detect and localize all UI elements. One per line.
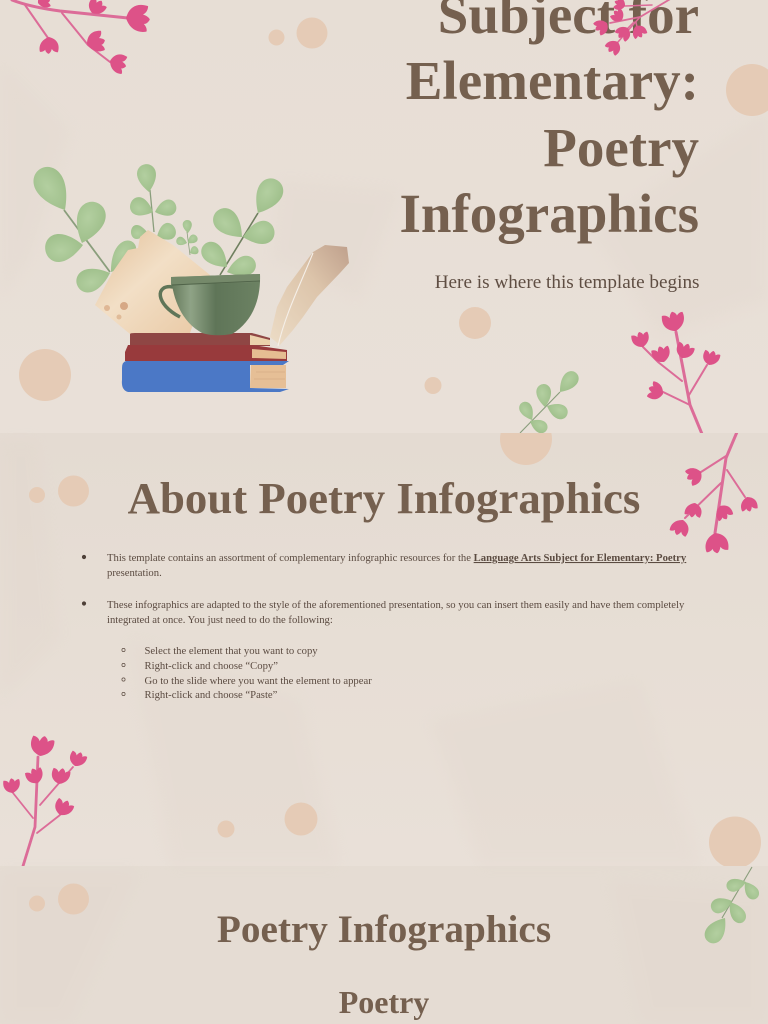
sub-list <box>122 646 372 701</box>
book: blue <box>122 361 289 392</box>
plant: right sprig <box>197 174 288 281</box>
parchment <box>95 230 210 334</box>
subtitle: Here is where this template begins <box>435 272 700 293</box>
book: red <box>125 345 287 361</box>
background: slide 1 <box>0 0 768 433</box>
branch: slide 1 right pink <box>630 309 721 434</box>
body text: bullet list <box>82 553 687 701</box>
plant: centre sprig <box>127 163 179 244</box>
title <box>400 0 699 244</box>
branch: top left pink <box>12 0 150 75</box>
sub-list: Right-click and choose “Copy” <box>144 661 278 672</box>
background: slide 3 <box>0 866 768 1024</box>
bullet 2: integrated at once. You just need to do the following: <box>107 615 333 626</box>
title: Poetry <box>543 117 699 178</box>
sub-list: Right-click and choose “Paste” <box>144 690 278 701</box>
branch: slide 2 right pink <box>669 432 759 555</box>
sub-list: Select the element that you want to copy <box>144 646 318 657</box>
bullet 1: This template contains an assortment of complementary infographic resources for the Language Arts Subject for Elementary: Poetry <box>107 553 687 564</box>
bullet 2 <box>82 600 685 626</box>
bullet 1: presentation. <box>107 568 162 579</box>
heading: poetry infographics: Poetry Infographics <box>217 908 551 951</box>
decorative circles: slide 3 <box>29 884 89 914</box>
sprig: slide 3 green <box>701 867 762 947</box>
bullet 2: These infographics are adapted to the style of the aforementioned presentation, so you can insert them easily and have them completely <box>107 600 685 611</box>
book: thin red <box>130 333 270 346</box>
quill <box>270 245 349 346</box>
sub-list: Go to the slide where you want the element to appear <box>144 676 372 687</box>
bullet 1 <box>82 553 687 579</box>
title: Elementary: <box>406 50 699 111</box>
sprig: slide 1 green <box>519 371 579 433</box>
cup <box>171 274 260 335</box>
branch: top right pink over title <box>592 0 672 57</box>
branch: slide 2 bottom left pink <box>2 734 88 866</box>
heading: about: About Poetry Infographics <box>128 473 640 523</box>
background: slide 2 <box>0 433 768 866</box>
illustration: books, cup, plants and quill <box>28 161 349 392</box>
decorative circles: slide 2 <box>29 413 761 868</box>
cup handle <box>160 287 180 317</box>
subheading: poetry: Poetry <box>339 984 429 1020</box>
plant: small sprig <box>175 220 200 257</box>
title: Infographics <box>400 183 699 244</box>
plant: left sprig <box>28 161 141 296</box>
decorative circles: slide 1 <box>19 18 768 401</box>
